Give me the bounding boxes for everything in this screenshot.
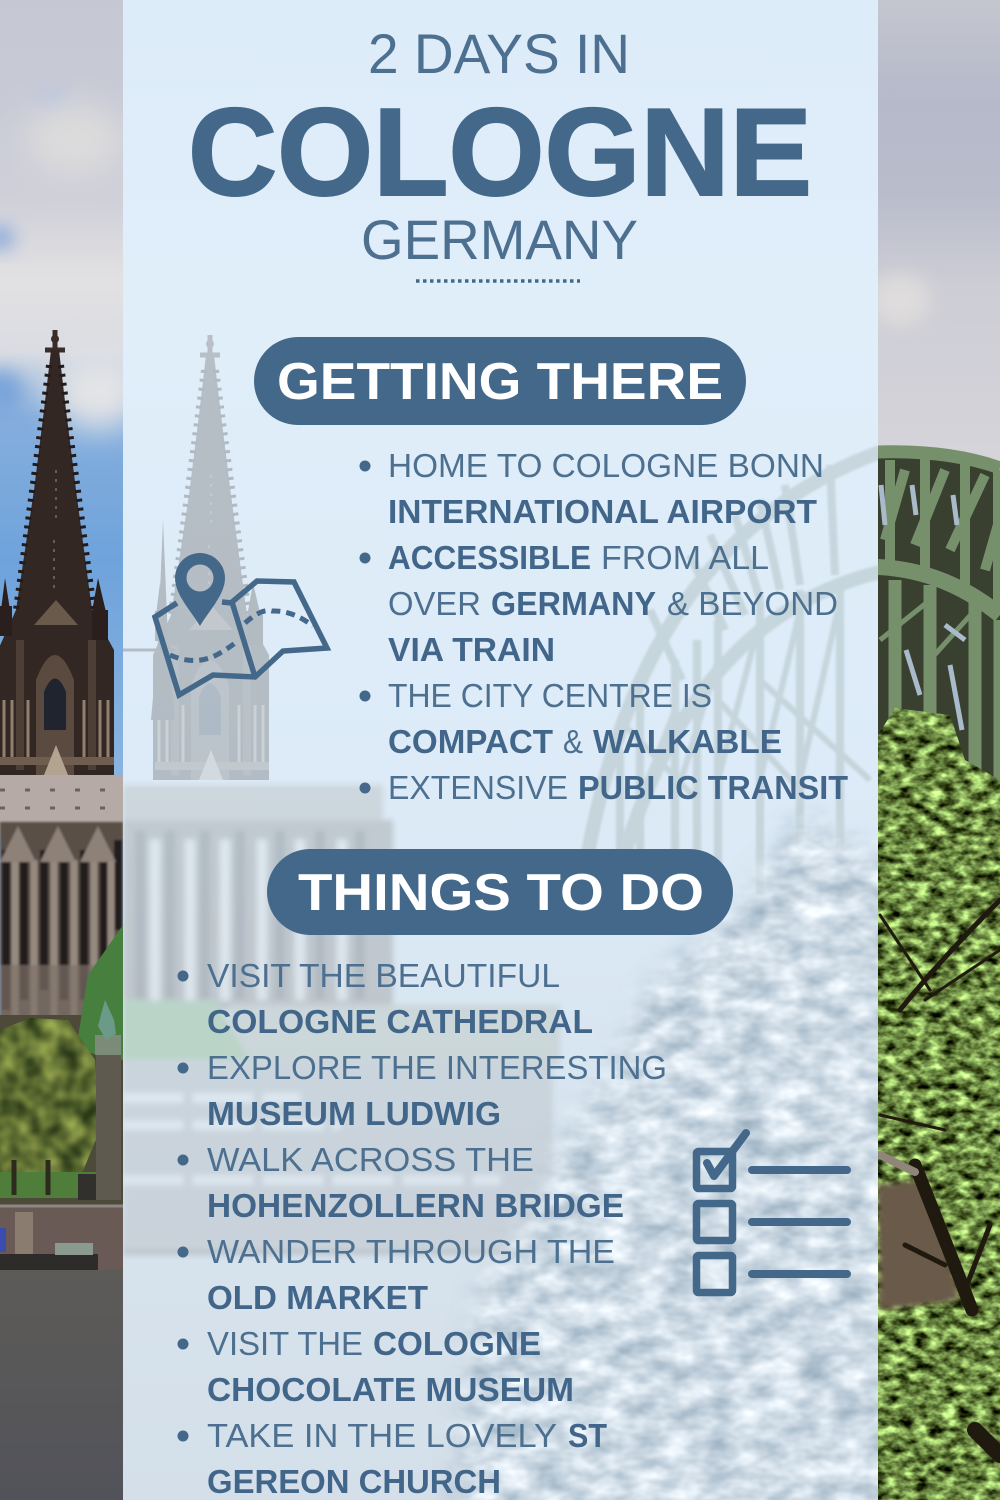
list: things to do: CHOCOLATE MUSEUM [207, 1371, 574, 1408]
list: things to do: WALK ACROSS THE [207, 1141, 534, 1178]
title line: Germany: GERMANY [361, 208, 638, 271]
list: getting there: & BEYOND [667, 585, 838, 622]
faded trees [450, 815, 900, 1500]
list: things to do: VISIT THE [207, 1325, 363, 1362]
translucent central panel with faded photo [122, 0, 900, 1500]
list: things to do: GEREON CHURCH [207, 1463, 501, 1500]
background photo: right strip with bridge and trees [870, 0, 1000, 1500]
list: getting there: GERMANY [491, 585, 656, 622]
faded cathedral and river bank [122, 335, 560, 1255]
title line: Cologne: COLOGNE [188, 84, 812, 222]
list: things to do: TAKE IN THE LOVELY [207, 1417, 557, 1454]
list: things to do: OLD MARKET [207, 1279, 428, 1316]
list: things to do: COLOGNE CATHEDRAL [207, 1003, 593, 1040]
title line: 2 days in: 2 DAYS IN [368, 22, 630, 85]
title [188, 22, 812, 271]
list: getting there [360, 447, 848, 806]
faded bridge [585, 452, 880, 900]
list: getting there: VIA TRAIN [388, 631, 555, 668]
list: getting there: PUBLIC TRANSIT [578, 769, 848, 806]
heading pill: things to do: THINGS TO DO [298, 864, 704, 922]
heading pill: getting there [254, 337, 746, 425]
list: getting there: HOME TO COLOGNE BONN [388, 447, 824, 484]
list: getting there: WALKABLE [593, 723, 782, 760]
list: getting there: EXTENSIVE [388, 769, 568, 806]
list: things to do: WANDER THROUGH THE [207, 1233, 615, 1270]
list: getting there: ACCESSIBLE [388, 539, 591, 576]
list: getting there: COMPACT [388, 723, 553, 760]
list: things to do [178, 957, 667, 1500]
icon: checklist [696, 1133, 847, 1292]
icon: folded map with location pin [155, 553, 327, 695]
list: things to do: COLOGNE [373, 1325, 541, 1362]
list: getting there: & [563, 723, 583, 760]
list: things to do: ST [568, 1417, 607, 1454]
list: getting there: INTERNATIONAL AIRPORT [388, 493, 817, 530]
list: things to do: EXPLORE THE INTERESTING [207, 1049, 667, 1086]
list: getting there: THE CITY CENTRE IS [388, 677, 712, 714]
list: things to do: MUSEUM LUDWIG [207, 1095, 501, 1132]
background photo: left strip with cathedral [0, 0, 123, 1500]
heading pill: things to do [267, 849, 733, 935]
list: things to do: HOHENZOLLERN BRIDGE [207, 1187, 624, 1224]
list: getting there: OVER [388, 585, 481, 622]
list: things to do: VISIT THE BEAUTIFUL [207, 957, 560, 994]
list: getting there: FROM ALL [601, 539, 769, 576]
heading pill: getting there: GETTING THERE [277, 353, 723, 411]
